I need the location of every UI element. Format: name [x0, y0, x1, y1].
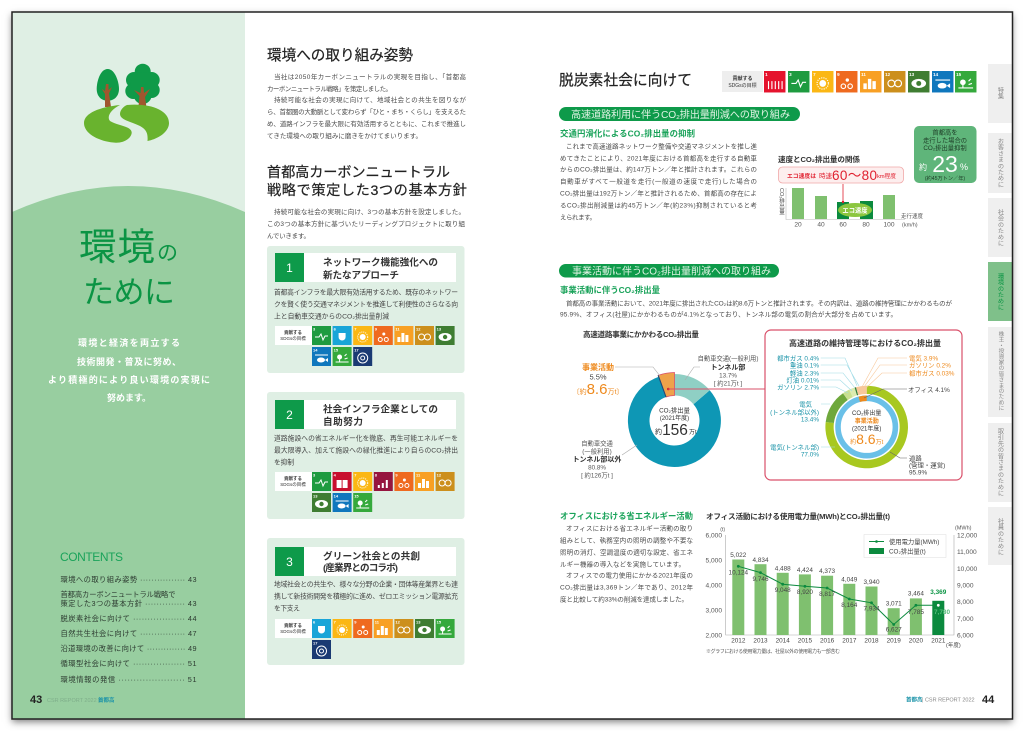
- label: non-tunnel traffic: [573, 438, 621, 480]
- text block: contents list: 脱炭素社会に向けて ·················· 44: [60, 614, 196, 623]
- icon: trees and winding road: [84, 64, 169, 143]
- donut chart: expressway business: [573, 354, 765, 480]
- CO2 value labels: 3,464: [908, 590, 924, 598]
- eco speed marker: [838, 203, 872, 217]
- left axis: 2,000: [705, 632, 722, 640]
- section banner: business activities: 事業活動に伴うCO₂排出量削減への取り組み: [572, 264, 771, 278]
- policy 1 description: 首都高インフラを最大限有効活用するため、既存のネットワー: [274, 288, 458, 296]
- title: ために: [83, 275, 175, 310]
- labels: fuel and electricity: 電気(トンネル部): [770, 442, 819, 452]
- SDGs label: [275, 619, 312, 638]
- text block: stance body: ら、首都圏の大動脈として変わらず「ひと・まち・くらし」を支えるた: [267, 107, 466, 116]
- label: business activity: 〔約8.6万t〕: [573, 381, 623, 398]
- text block: office body: 組みとして、執務室内の照明の調整や不要な: [560, 536, 694, 544]
- bars: CO2: [732, 560, 944, 635]
- bar chart: speed and CO2: 走行速度: [901, 212, 924, 220]
- policy 1 title: ネットワーク機能強化への: [323, 256, 438, 268]
- power value labels: 6,627: [886, 626, 902, 634]
- donut centre label: 事業活動: [855, 417, 879, 425]
- left axis: 3,000: [705, 608, 722, 614]
- axis labels: 20: [794, 222, 802, 228]
- text block: contents list: 循環型社会に向けて ·················· 51: [60, 659, 196, 668]
- footer: left page number: 首都高: [98, 696, 115, 704]
- SDGs label: [275, 472, 312, 491]
- callout: 23 percent: 首都高を: [932, 128, 958, 136]
- right axis: 11,000: [957, 549, 977, 556]
- labels: fuel and electricity: (トンネル部以外): [770, 408, 819, 416]
- section banner: expressway use: 高速道路利用に伴うCO₂排出量削減への取り組み: [571, 108, 790, 121]
- right axis: [955, 526, 978, 640]
- left axis: 4,000: [705, 582, 722, 590]
- eco speed marker: エコ速度: [842, 206, 868, 214]
- policy 3 description: を下支え: [274, 604, 300, 612]
- axis labels: 60: [839, 222, 847, 228]
- legend: [864, 534, 946, 558]
- labels: office and road: 95.9%: [909, 470, 927, 476]
- number badge 3: 3: [286, 555, 293, 569]
- year labels: [731, 638, 946, 644]
- text block: lead: 環境と経済を両立する: [78, 337, 180, 348]
- power value labels: 8,817: [819, 591, 836, 598]
- chart title: expressway business: 高速道路事業にかかわるCO₂排出量: [583, 329, 699, 339]
- labels: office fuels: [909, 354, 955, 378]
- callout: 23 percent: (約45万トン／年): [925, 174, 965, 182]
- donut centre label: (2021年度): [852, 424, 881, 432]
- axis labels: 40: [817, 222, 825, 228]
- axis labels: [794, 222, 895, 228]
- text block: stance body: め、道路インフラを最大限に有効活用するとともに、これまで推進し: [267, 119, 466, 128]
- callout: eco speed: [778, 167, 904, 183]
- text block: lead: 努めます。: [107, 392, 151, 403]
- labels: fuel and electricity: 重油 0.1%: [790, 360, 819, 370]
- bar chart: speed and CO2: CO₂排出量: [778, 188, 785, 216]
- SDG icons: [312, 619, 455, 659]
- labels: office fuels: 電気 3.9%: [909, 354, 938, 362]
- SDGs label top: SDGsの目標: [728, 82, 757, 89]
- SDG icons: 9: [375, 326, 378, 332]
- SDG icons: 7: [354, 326, 357, 332]
- SDG icons top row: 15: [956, 72, 962, 77]
- labels: office fuels: ガソリン 0.2%: [909, 360, 951, 370]
- SDG icons: 3: [313, 472, 316, 478]
- policy 3 title: グリーン社会との共創: [323, 550, 420, 562]
- text block: policies body: [267, 207, 466, 240]
- heading: three basic policies: 首都高カーボンニュートラル: [267, 164, 450, 181]
- label: non-tunnel traffic: 自動車交通: [581, 438, 613, 448]
- callout: 23 percent: 約: [919, 162, 927, 172]
- year labels: 2016: [820, 638, 835, 644]
- text block: smoother traffic body: めてきたことにより、2021年度における首都高を走行する自動車: [560, 154, 758, 162]
- panel: policy 1: [267, 246, 464, 373]
- right axis: 10,000: [957, 566, 978, 573]
- SDG icons: 11: [416, 472, 421, 478]
- SDG icons: 15: [334, 348, 339, 352]
- SDG icons: [312, 326, 455, 366]
- label: non-tunnel traffic: 80.8%: [588, 464, 606, 472]
- SDG icons top row: 1: [765, 72, 768, 77]
- label: tunnel traffic: [698, 354, 758, 388]
- CO2 value labels: 5,022: [730, 552, 747, 559]
- left axis: 6,000: [705, 532, 722, 540]
- labels: fuel and electricity: 13.4%: [801, 416, 819, 424]
- combo chart: office power and CO2: (年度): [946, 641, 961, 649]
- policy 1 title: [304, 253, 456, 282]
- text block: office body: 度と比較して約33%の削減を達成しました。: [560, 594, 688, 604]
- title: の: [157, 242, 178, 265]
- text block: business body: 95.9%、オフィス(社屋)にかかわるものが4.1%となっており、トンネル部の電気の割合が大部分を占めています。: [560, 310, 897, 318]
- SDGs label: SDGsの目標: [280, 481, 306, 488]
- heading: three basic policies: 戦略で策定した3つの基本方針: [267, 182, 467, 199]
- chart title: office power: オフィス活動における使用電力量(MWh)とCO₂排出量(t): [706, 511, 890, 521]
- labels: fuel and electricity: 77.0%: [801, 452, 819, 458]
- policy 3 description: [274, 580, 458, 612]
- callout: 23 percent: %: [960, 162, 968, 172]
- right axis: 7,000: [957, 616, 974, 623]
- footer: left page number: CSR REPORT 2022 |: [47, 698, 100, 704]
- callout: 23 percent: 23: [932, 151, 958, 177]
- SDG icons: 14: [313, 348, 318, 352]
- side tabs: 環境のために: [996, 273, 1004, 310]
- SDGs label: 貢献する: [284, 329, 302, 336]
- callout: 23 percent: [914, 126, 976, 183]
- policy 1 description: 上と自動車交通からのCO₂排出量削減: [274, 312, 389, 320]
- donut centre label: (2021年度): [660, 414, 689, 422]
- title: 環境: [79, 226, 155, 268]
- donut centre label: CO₂排出量: [852, 409, 881, 417]
- power value labels: 8,164: [841, 602, 858, 609]
- right axis: 8,000: [957, 599, 974, 606]
- footer: right page number: [906, 694, 995, 706]
- side tabs: [988, 64, 1012, 565]
- panel: policy 3: [267, 538, 464, 665]
- right axis: 9,000: [957, 582, 974, 590]
- panel: policy 2: [267, 392, 464, 519]
- text block: office body: CO₂排出量は3,369トン／年であり、2012年: [560, 582, 694, 592]
- labels: office and road: [908, 386, 950, 476]
- label: tunnel traffic: 13.7%: [719, 372, 737, 380]
- label: non-tunnel traffic: (一般利用): [582, 446, 612, 456]
- labels: fuel and electricity: ガソリン 2.7%: [777, 382, 819, 392]
- label: tunnel traffic: 自動車交通(一般利用): [698, 354, 758, 362]
- policy 2 title: 社会インフラ企業としての: [323, 404, 438, 416]
- text block: stance body: [267, 72, 466, 140]
- bar chart: speed and CO2: [778, 154, 924, 228]
- legend: 使用電力量(MWh): [889, 537, 939, 546]
- text block: business body: [560, 298, 952, 318]
- number badge 2: [275, 400, 304, 429]
- donut centre label: [655, 406, 697, 439]
- text block: business body: 首都高の事業活動において、2021年度に排出されたCO₂は約8.6万トンと推計されます。その内訳は、道路の維持管理にかかわるものが: [566, 298, 952, 308]
- donut centre label: 万t: [689, 429, 697, 436]
- labels: office and road: (管理・運営): [909, 460, 945, 470]
- labels: fuel and electricity: 電気: [799, 400, 813, 408]
- label: tunnel traffic: [ 約21万t ]: [714, 378, 742, 388]
- label: non-tunnel traffic: [ 約126万t ]: [581, 470, 613, 480]
- text block: office body: オフィスでの電力使用にかかる2021年度の: [566, 570, 693, 580]
- SDG icons: [312, 472, 455, 512]
- text block: policies body: 持続可能な社会の実現に向け、3つの基本方針を設定しました。: [274, 207, 465, 216]
- text block: smoother traffic body: るCO₂排出削減量は約45万トン／年(約23%)抑制されていると考: [560, 200, 758, 210]
- SDGs label top: [722, 71, 763, 92]
- labels: fuel and electricity: [770, 354, 819, 458]
- label: business activity: [573, 362, 623, 398]
- SDG icons top row: 13: [909, 72, 915, 77]
- heading: three basic policies: [267, 164, 467, 199]
- label: tunnel traffic: トンネル部: [711, 362, 745, 372]
- text block: smoother traffic body: [560, 142, 758, 222]
- policy 2 description: [274, 434, 458, 466]
- power value labels: 9,048: [775, 587, 791, 594]
- SDG icons: 9: [395, 472, 398, 478]
- text block: stance body: カーボンニュートラル戦略」を策定しました。: [267, 84, 392, 93]
- CO2 value labels: [730, 552, 947, 608]
- policy 3 description: 携して新技術開発を積極的に進め、ゼロエミッション電源拡充: [274, 592, 458, 600]
- power value labels: 7,785: [908, 609, 924, 616]
- callout: eco speed: 時速: [819, 171, 832, 180]
- label: business activity: 事業活動: [582, 362, 614, 372]
- footnote: ※グラフにおける使用電力量は、社屋以外の使用電力も一部含む: [706, 648, 840, 655]
- SDG icons top row: 14: [933, 72, 939, 77]
- CO2 value labels: 4,488: [775, 566, 791, 572]
- policy 1 title: 新たなアプローチ: [323, 270, 399, 282]
- power value labels: 7,934: [864, 606, 880, 612]
- right axis: (MWh): [955, 526, 972, 532]
- year labels: 2020: [909, 638, 923, 644]
- legend: CO₂排出量(t): [889, 546, 926, 556]
- left axis: (t): [720, 527, 725, 533]
- donut centre label: CO₂排出量: [659, 406, 691, 414]
- text block: policies body: この3つの基本方針に基づいたリーディングプロジェクトに取り組: [267, 219, 466, 228]
- SDG icons: 12: [395, 620, 401, 624]
- labels: office fuels: 都市ガス 0.03%: [909, 368, 955, 378]
- policy 1 description: クを賢く使う交通マネジメントを推進して利便性のさらなる向: [274, 300, 458, 308]
- SDG icons top row: 7: [813, 72, 816, 77]
- SDGs label top: 貢献する: [732, 75, 753, 82]
- text block: contents list: [60, 575, 196, 684]
- CO2 value labels: 4,049: [841, 576, 858, 584]
- text block: smoother traffic body: えられます。: [560, 214, 596, 222]
- donut centre label: 156: [662, 422, 688, 439]
- SDG icons: 11: [395, 326, 400, 332]
- side tabs: 社会のために: [996, 208, 1004, 246]
- SDG icons: 13: [313, 494, 318, 498]
- subheading: office energy saving: オフィスにおける省エネルギー活動: [560, 511, 693, 521]
- left axis: [705, 527, 725, 640]
- SDGs label: SDGsの目標: [280, 628, 306, 635]
- policy 2 title: 自助努力: [323, 416, 363, 428]
- callout: 23 percent: CO₂排出量抑制: [923, 143, 967, 152]
- SDGs label: 貢献する: [284, 622, 302, 629]
- year labels: 2021: [931, 638, 946, 644]
- text block: office body: ルギー機器の導入などを実施しています。: [560, 560, 685, 568]
- SDG icons: 15: [354, 494, 359, 498]
- side tabs: 社員のために: [996, 517, 1004, 555]
- donut centre label: 約8.6万t: [850, 431, 884, 447]
- SDG icons: 7: [354, 472, 357, 478]
- label: business activity: 5.5%: [589, 372, 607, 382]
- SDG icons: 14: [334, 494, 339, 498]
- axis labels: 80: [862, 222, 870, 228]
- callout: eco speed: 60〜80: [832, 168, 877, 183]
- left axis: 5,000: [705, 558, 722, 564]
- text block: contents list: 自然共生社会に向けて ················ 47: [60, 629, 196, 638]
- right axis: 6,000: [957, 632, 974, 640]
- SDG icons top row: 3: [789, 72, 792, 77]
- SDG icons: 17: [313, 640, 318, 646]
- text block: smoother traffic body: これまで高速道路ネットワーク整備や交通マネジメントを推し進: [566, 142, 758, 150]
- text block: lead: [48, 337, 210, 403]
- callout: 23 percent: 走行した場合の: [923, 136, 967, 144]
- panel title: 高速道路の維持管理等におけるCO₂排出量: [789, 338, 941, 348]
- labels: office and road: 道路: [909, 454, 922, 462]
- SDG icons top row: 11: [861, 72, 866, 77]
- year labels: 2015: [798, 638, 812, 644]
- CO2 value labels: 3,071: [886, 600, 902, 608]
- axis labels: 100: [883, 222, 895, 228]
- footer: right page number: 44: [982, 694, 995, 706]
- SDG icons: 17: [354, 348, 359, 352]
- year labels: 2018: [864, 638, 879, 644]
- CO2 value labels: 4,424: [797, 567, 813, 574]
- bar chart: speed and CO2: (km/h): [902, 222, 918, 228]
- SDG icons: 8: [375, 472, 378, 478]
- policy 2 description: を抑制: [274, 458, 294, 466]
- year labels: 2014: [776, 638, 790, 644]
- side tabs: 特集: [996, 86, 1004, 101]
- heading: contents: CONTENTS: [60, 550, 123, 564]
- power value labels: 7,780: [934, 609, 950, 616]
- text block: contents list: 首都高カーボンニュートラル戦略で: [60, 590, 176, 599]
- SDG icons top row: 12: [885, 72, 891, 77]
- text block: contents list: 沿道環境の改善に向けて ·············· 49: [60, 644, 196, 653]
- labels: fuel and electricity: 軽油 2.3%: [790, 368, 819, 378]
- labels: fuel and electricity: 灯油 0.01%: [786, 376, 819, 384]
- SDG icons: 6: [334, 326, 337, 332]
- footer: right page number: 首都高: [906, 696, 923, 704]
- number badge 1: 1: [286, 261, 293, 275]
- side tabs: 株主・投資家の皆さまのために: [997, 330, 1004, 411]
- text block: stance body: 当社は2050年カーボンニュートラルの実現を目指し、「首都高: [274, 72, 466, 81]
- footer: right page number: | CSR REPORT 2022: [922, 698, 975, 704]
- SDG icons: 7: [334, 620, 337, 624]
- policy 3 title: [304, 547, 456, 576]
- subheading: smoother traffic: 交通円滑化によるCO₂排出量の抑制: [560, 128, 695, 138]
- policy 2 title: [304, 400, 456, 429]
- text block: lead: 技術開発・普及に努め、: [77, 356, 181, 367]
- year labels: 2017: [842, 638, 857, 644]
- SDG icons top row: 9: [837, 72, 840, 77]
- year labels: 2019: [887, 638, 901, 644]
- text block: office body: オフィスにおける省エネルギー活動の取り: [566, 524, 693, 532]
- text block: smoother traffic body: CO₂排出量は192万トン／年と推計されるため、首都高の存在によ: [560, 188, 757, 198]
- SDGs label: SDGsの目標: [280, 335, 306, 342]
- policy 3 description: 地域社会との共生や、様々な分野の企業・団体等産業界とも連: [274, 580, 458, 588]
- SDG icons: 11: [375, 620, 380, 624]
- side tabs: お客さまのために: [996, 138, 1004, 188]
- title: [79, 226, 178, 310]
- SDG icons: 9: [354, 620, 357, 624]
- donut centre label: 約: [655, 427, 662, 436]
- SDG icons: 13: [416, 620, 421, 624]
- text block: contents list: 環境情報の発信 ······················ 51: [60, 675, 196, 684]
- double donut chart: [825, 386, 908, 468]
- SDG icons top row: [764, 71, 976, 92]
- number badge 3: [275, 547, 304, 576]
- text block: smoother traffic body: からのCO₂排出量は、約147万トン／年と推計されます。これらの: [560, 164, 757, 174]
- power value labels: [729, 570, 950, 634]
- SDG icons: 13: [437, 326, 442, 332]
- year labels: 2012: [731, 638, 746, 644]
- SDG icons: 3: [313, 326, 316, 332]
- text block: office body: 照明の消灯、空調温度の適切な設定、省エネ: [560, 548, 694, 556]
- CO2 value labels: 4,373: [819, 568, 836, 575]
- label: non-tunnel traffic: トンネル部以外: [573, 454, 621, 464]
- text block: lead: より積極的により良い環境の実現に: [48, 374, 210, 385]
- panel: left cover column: [12, 12, 245, 719]
- year labels: 2013: [753, 638, 768, 644]
- policy 2 description: 最大限導入、加えて施設への緑化推進により自らのCO₂排出: [274, 446, 458, 454]
- text block: smoother traffic body: 自動車がすべて一般道を走行(一般道の速度で走行)した場合の: [560, 176, 757, 186]
- heading: environmental stance: 環境への取り組み姿勢: [267, 47, 413, 64]
- policy 1 description: [274, 288, 458, 320]
- text block: office body: [560, 524, 694, 604]
- line: power use: [737, 565, 940, 626]
- power value labels: 8,920: [797, 589, 813, 596]
- footer: left page number: [30, 694, 115, 706]
- text block: stance body: 持続可能な社会の実現に向けて、地域社会との共生を図りなが: [274, 95, 466, 104]
- labels: fuel and electricity: 都市ガス 0.4%: [777, 354, 819, 362]
- power value labels: 10,124: [729, 570, 749, 576]
- donut centre label: [850, 409, 884, 447]
- CO2 value labels: 4,834: [752, 557, 769, 564]
- SDG icons: 12: [437, 472, 442, 478]
- CO2 value labels: 3,369: [930, 589, 947, 596]
- SDG icons: 15: [437, 620, 442, 624]
- subheading: business emissions: 事業活動に伴うCO₂排出量: [560, 285, 661, 295]
- CO2 value labels: 3,940: [864, 579, 880, 586]
- chart title: 速度とCO₂排出量の関係: [778, 154, 860, 164]
- combo chart: office power and CO2: [705, 526, 978, 655]
- heading: decarbonized society: 脱炭素社会に向けて: [559, 72, 692, 89]
- side tabs: 取引先の皆さまのために: [996, 428, 1004, 496]
- labels: office and road: オフィス 4.1%: [908, 386, 950, 394]
- policy 3 title: (産業界とのコラボ): [323, 562, 398, 574]
- text block: contents list: 環境への取り組み姿勢 ················ 43: [60, 575, 196, 584]
- text block: stance body: てきた環境への取り組みに磨きをかけてまいります。: [267, 131, 422, 140]
- callout: eco speed: エコ速度は: [787, 172, 816, 180]
- power value labels: 9,746: [752, 576, 769, 583]
- SDG icons: 12: [416, 326, 421, 332]
- footer: left page number: 43: [30, 694, 42, 706]
- panel: maintenance emissions: [765, 330, 962, 480]
- SDG icons: 6: [313, 620, 316, 624]
- text block: contents list: 策定した3つの基本方針 ·············· 43: [60, 599, 196, 608]
- SDGs label: 貢献する: [284, 475, 302, 482]
- number badge 2: 2: [286, 408, 293, 422]
- right axis: 12,000: [957, 532, 978, 540]
- callout: eco speed: km程度: [877, 172, 896, 180]
- number badge 1: [275, 253, 304, 282]
- text block: policies body: んでいきます。: [267, 232, 310, 240]
- policy 2 description: 道路施設への省エネルギー化を徹底、再生可能エネルギーを: [274, 434, 458, 442]
- SDG icons: 4: [334, 472, 337, 478]
- SDGs label: [275, 326, 312, 345]
